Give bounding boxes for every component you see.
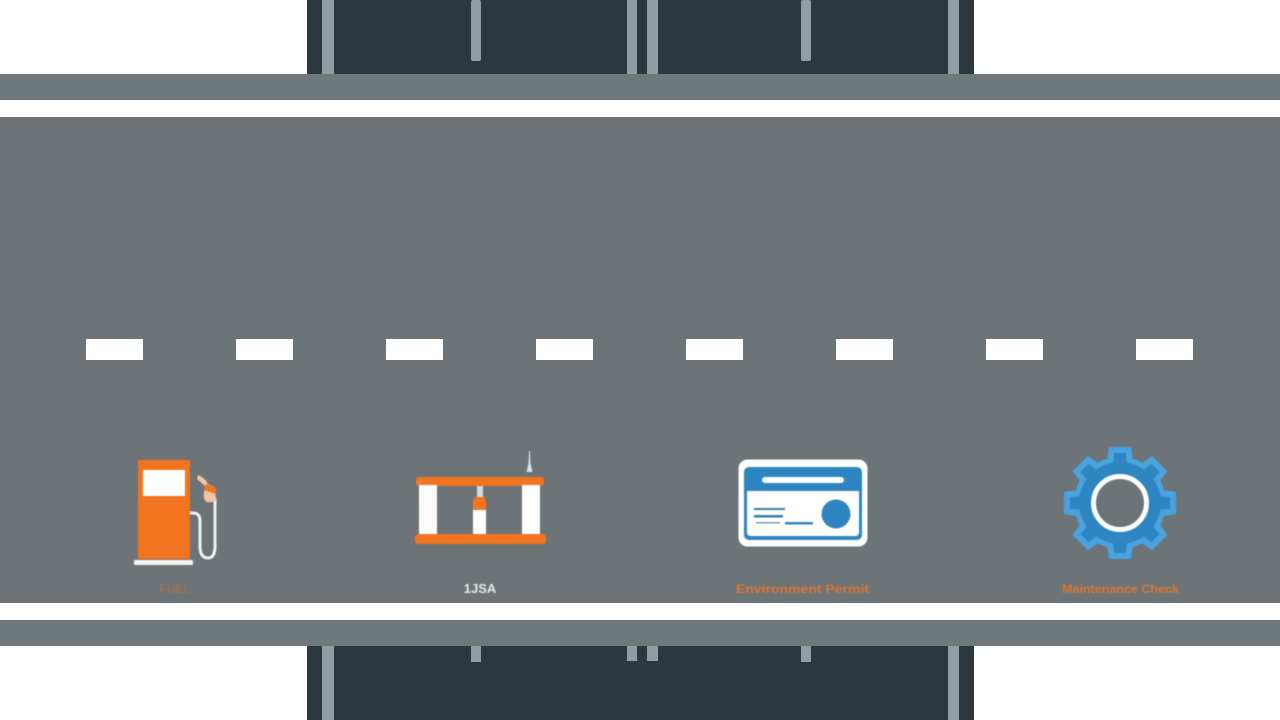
icon: road barrier — [415, 451, 546, 544]
icon: gear — [1064, 447, 1176, 559]
label: fuel: FUEL — [160, 582, 191, 596]
crossing road: bottom section — [307, 646, 974, 720]
label: maintenance: Maintenance Check — [1062, 582, 1179, 596]
icon: permit card — [738, 460, 868, 546]
label: toll: 1JSA — [464, 581, 497, 596]
main road surface — [0, 117, 1280, 603]
label: permit: Environment Permit — [736, 582, 869, 596]
crossing road: top section — [307, 0, 974, 74]
upper road shoulder — [0, 74, 1280, 100]
icon: fuel pump — [134, 460, 216, 565]
lane centre dashes — [86, 339, 1193, 360]
lower road shoulder — [0, 620, 1280, 646]
